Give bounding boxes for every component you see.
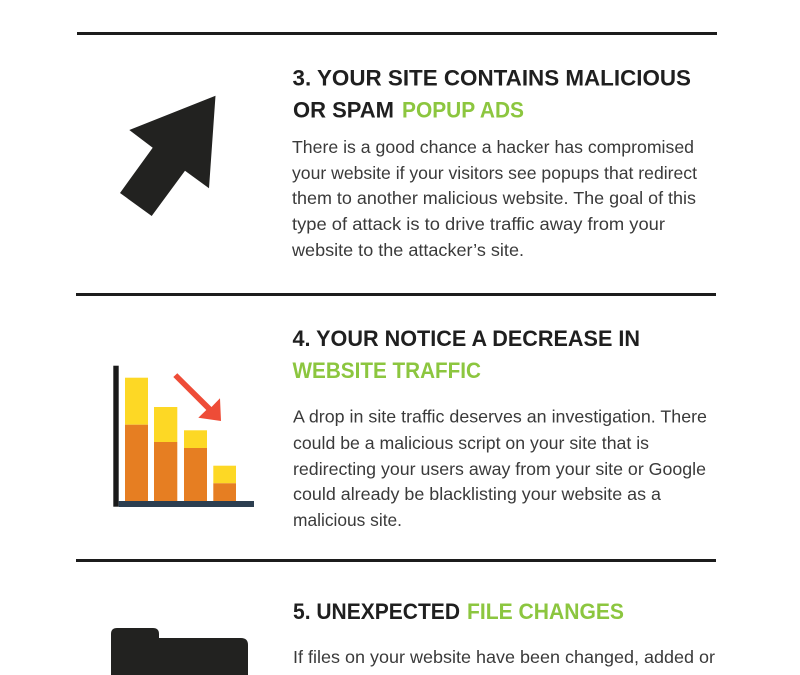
text block: sign 5 description: If files on your website have been changed, added or: [293, 647, 715, 667]
icon: black folder: [111, 628, 248, 675]
text block: sign 3 description: There is a good chance a hacker has compromised: [292, 137, 694, 157]
heading: sign 4: 4. YOUR NOTICE A DECREASE IN: [292, 326, 640, 351]
heading: sign 3: OR SPAM: [293, 98, 394, 122]
text block: sign 4 description: malicious site.: [293, 510, 402, 530]
text block: sign 3 description: them to another malicious website. The goal of this: [292, 188, 696, 208]
text block: sign 4 description: A drop in site traffic deserves an investigation. There: [293, 406, 707, 426]
text block: sign 3 description: your website if your visitors see popups that redirect: [292, 163, 697, 183]
text block: sign 4 description: could be a malicious script on your site that is: [293, 433, 649, 453]
heading: sign 3: 3. YOUR SITE CONTAINS MALICIOUS: [292, 65, 691, 90]
text block: sign 3 description: website to the attacker’s site.: [291, 240, 524, 260]
icon: falling bar chart: [113, 366, 254, 507]
text block: sign 4 description: could already be blacklisting your website as a: [293, 484, 661, 504]
heading: sign 5: FILE CHANGES: [467, 599, 624, 624]
heading: sign 4: [292, 326, 640, 383]
panel: popup ads: [120, 65, 697, 260]
text block: sign 3 description: type of attack is to drive traffic away from your: [292, 214, 665, 234]
heading: sign 4: WEBSITE TRAFFIC: [292, 358, 481, 383]
text block: sign 3 description: [291, 137, 697, 260]
heading: sign 5: [293, 599, 624, 624]
icon: black cursor arrow: [120, 96, 216, 216]
heading: sign 5: 5. UNEXPECTED: [293, 599, 460, 624]
panel: file changes: [111, 599, 715, 675]
heading: sign 3: POPUP ADS: [402, 98, 524, 122]
heading: sign 3: [292, 65, 691, 122]
panel: traffic decrease: [113, 326, 707, 530]
text block: sign 4 description: [293, 406, 707, 530]
text block: sign 4 description: redirecting your users away from your site or Google: [293, 459, 706, 479]
